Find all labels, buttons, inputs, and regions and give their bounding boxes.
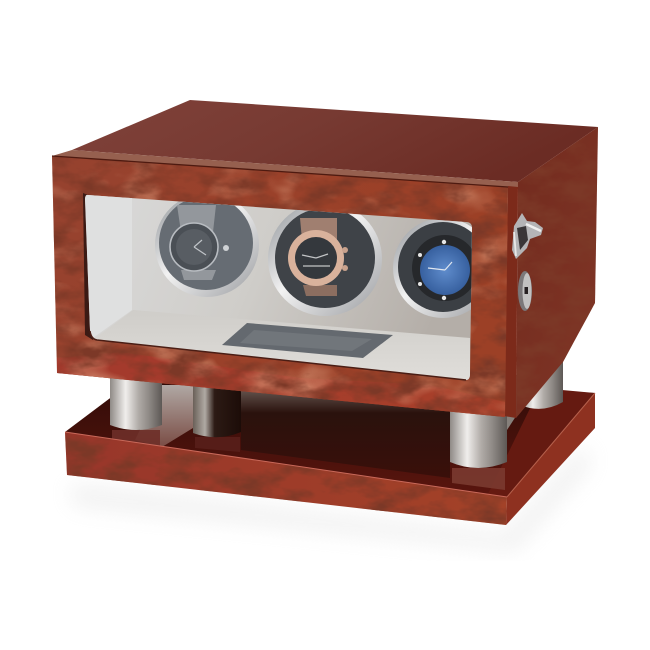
base right face bbox=[506, 393, 595, 525]
interior wall and floor bbox=[128, 310, 470, 380]
base top surface bbox=[65, 368, 595, 497]
lid seam strip bbox=[52, 150, 518, 189]
hinge latch bbox=[512, 213, 543, 259]
product illustration: triple watch winder cabinet bbox=[52, 100, 598, 544]
front-right pillar bbox=[450, 410, 507, 468]
control tray bbox=[222, 323, 393, 358]
base plinth bbox=[64, 383, 596, 525]
burl texture bbox=[50, 150, 510, 420]
floor shadow bbox=[70, 445, 590, 550]
front-left pillar bbox=[110, 375, 162, 430]
dark cavity under cabinet bbox=[241, 385, 450, 478]
cabinet lid top bbox=[72, 100, 598, 182]
cabinet front frame bbox=[50, 150, 510, 420]
grey reflection between pillars bbox=[135, 385, 193, 447]
watch winder right bbox=[393, 220, 472, 318]
pillars bbox=[110, 355, 563, 478]
watch winder centre bbox=[268, 202, 382, 316]
key lock bbox=[518, 271, 532, 311]
watch winder left bbox=[155, 193, 259, 297]
lower bevel highlight bbox=[57, 352, 505, 417]
pillar reflections bbox=[112, 430, 160, 447]
window bbox=[83, 193, 493, 382]
back-left pillar bbox=[193, 385, 241, 437]
base front face bbox=[65, 432, 507, 525]
cabinet right side bbox=[504, 125, 602, 420]
back-right pillar bbox=[507, 355, 563, 430]
